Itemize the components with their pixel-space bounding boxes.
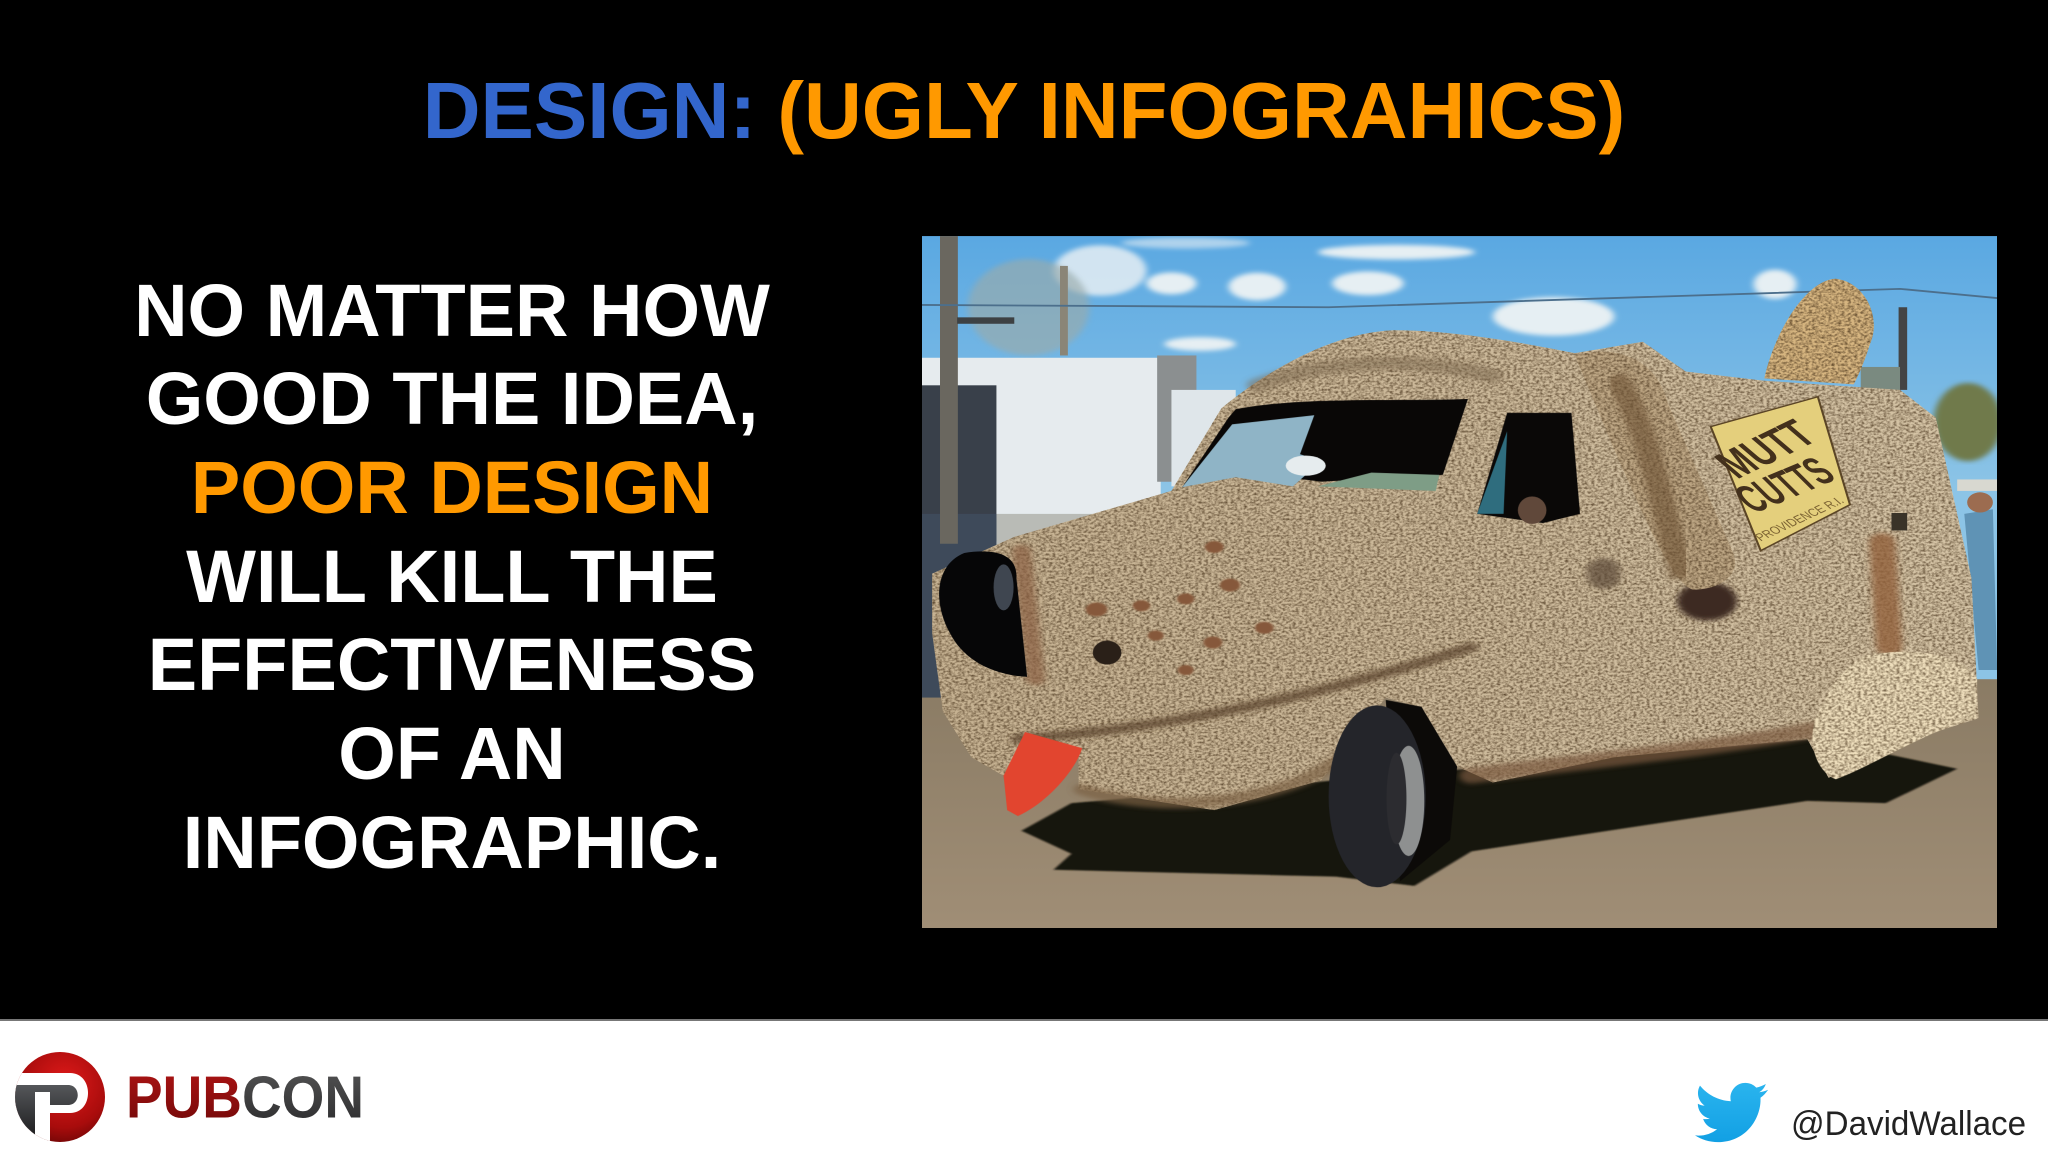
side window xyxy=(1477,413,1580,523)
front wheel xyxy=(1329,700,1457,887)
body text block: POOR DESIGN xyxy=(191,446,713,529)
body text block: GOOD THE IDEA, xyxy=(146,357,758,440)
fur shading xyxy=(1018,364,1889,803)
twitter handle: @DavidWallace xyxy=(1791,1105,2026,1143)
utility poles xyxy=(940,236,958,544)
tongue xyxy=(1004,732,1082,816)
small vent xyxy=(1891,513,1907,530)
sign: Mutt Cutts xyxy=(1704,397,1850,551)
logo white P band xyxy=(15,1073,88,1141)
footer bar xyxy=(0,1019,2048,1152)
body text block: NO MATTER HOW xyxy=(134,268,770,352)
van body xyxy=(932,330,1979,810)
trees xyxy=(968,259,1089,355)
ground xyxy=(921,679,1997,929)
logo wordmark: PUBCON xyxy=(126,1064,364,1130)
rear ear xyxy=(1764,279,1874,384)
spots xyxy=(1086,541,1274,675)
building xyxy=(921,358,1161,518)
paw xyxy=(1812,652,1977,779)
title: DESIGN: (UGLY INFOGRAHICS) xyxy=(423,66,1625,155)
body text block: EFFECTIVENESS xyxy=(148,623,756,706)
body text block: INFOGRAPHIC. xyxy=(183,801,721,884)
photo background: sky xyxy=(922,236,1997,680)
sign: Mutt Cutts: PROVIDENCE R.I. xyxy=(1752,494,1847,544)
clouds xyxy=(1054,237,1796,351)
body text block xyxy=(134,268,770,884)
icon: twitter bird xyxy=(1695,1083,1768,1142)
bystander xyxy=(1964,509,1997,670)
logo dark P xyxy=(10,1085,78,1135)
body text block: OF AN xyxy=(338,712,566,795)
shadow under van xyxy=(1021,739,1957,886)
logo ball xyxy=(15,1052,105,1142)
hanging ear xyxy=(1677,582,1737,620)
logo: Pubcon xyxy=(15,1052,360,1142)
sign: Mutt Cutts: CUTTS xyxy=(1724,449,1846,522)
body text block: WILL KILL THE xyxy=(186,535,718,618)
photo: dog-shaped van xyxy=(921,236,2002,929)
windshield xyxy=(1182,399,1468,487)
sign: Mutt Cutts: MUTT xyxy=(1704,412,1827,486)
nose xyxy=(939,551,1027,677)
